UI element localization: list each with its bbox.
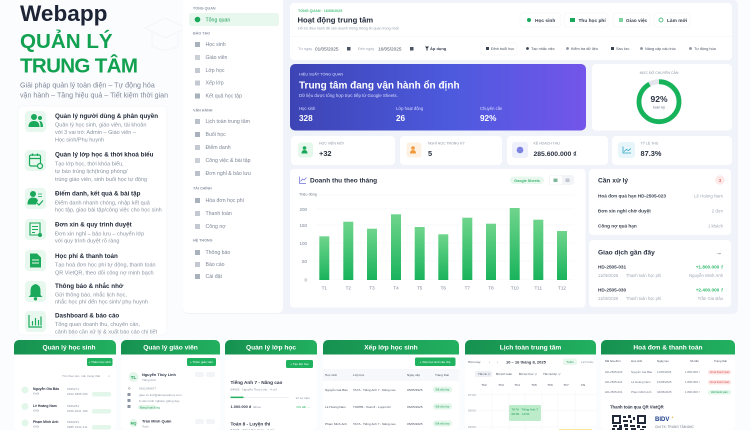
- menu group: tài chính: Công nợ: [206, 224, 226, 230]
- menu group: đào tạo: Kết quả học tập: [206, 94, 242, 100]
- card: quản lý lớp học: [225, 340, 317, 430]
- stat: học sinh: Học sinh: [299, 106, 316, 111]
- KPI: tỷ lệ thu: [612, 136, 732, 165]
- card: lịch toàn trung tâm: 09:00: [468, 425, 476, 429]
- menu group: hệ thống: HỆ THỐNG: [193, 238, 213, 242]
- card: xếp lớp học sinh: 05/05/2025: [407, 422, 423, 426]
- quick action buttons: Làm mới: [667, 18, 687, 24]
- card: quản lý lớp học: Quản lý lớp học: [246, 344, 296, 352]
- menu group: vận hành: VẬN HÀNH: [193, 107, 213, 112]
- x axis labels: T5: [417, 285, 423, 290]
- card: hoá đơn & thanh toán: ✦: [671, 416, 675, 420]
- card: lịch toàn trung tâm: Lịch toàn trung tâm: [500, 344, 561, 352]
- feature: lớp học: Quản lý lớp học & thời khoá biểu: [55, 152, 154, 158]
- card: quản lý giáo viên: Toán: [142, 424, 149, 428]
- feature: người dùng: với 3 vai trò: Admin – Giáo viên –: [55, 130, 137, 136]
- feature: điểm danh: Điểm danh nhanh chóng, nhập kết quả: [55, 199, 151, 206]
- card: quản lý giáo viên: Đang hoạt động: [140, 405, 160, 409]
- stat: học sinh: [299, 106, 316, 123]
- active menu item: [189, 13, 279, 26]
- panel: attendance ring: toàn kỳ: [653, 106, 665, 110]
- x axis labels: T1: [322, 285, 327, 290]
- feature: học phí: QR VietQR, theo dõi công nợ minh bạch: [55, 270, 154, 276]
- stat: chuyên cần: Chuyên cần: [480, 106, 503, 111]
- menu group: vận hành: Buổi học: [206, 131, 226, 138]
- KPI: học viên mới: [291, 136, 395, 165]
- quick action buttons: Học sinh: [535, 18, 555, 24]
- feature: thông báo: Thông báo & nhắc nhở: [55, 283, 124, 290]
- panel: page header: Hoạt động trung tâm: [298, 16, 373, 24]
- bars: [319, 208, 567, 280]
- title: Quản lý trung tâm: [20, 29, 138, 78]
- y axis labels: 200: [299, 207, 307, 212]
- card: lịch toàn trung tâm: 07:00: [468, 393, 476, 397]
- card: xếp lớp học sinh: TO8HB - Toán 8 - Luyện thi: [353, 405, 391, 409]
- panel: hero performance summary: HIỆU SUẤT TỔNG QUAN: [299, 71, 343, 76]
- card: lịch toàn trung tâm: 08:00: [468, 408, 476, 412]
- feature: học phí: [25, 250, 156, 276]
- y axis labels: 50: [302, 259, 307, 264]
- menu group: hệ thống: Cài đặt: [206, 274, 222, 280]
- feature: người dùng: Quản lý người dùng & phân quyền: [55, 113, 158, 120]
- card: hoá đơn & thanh toán: Phạm Minh Anh: [631, 390, 652, 394]
- menu group: vận hành: Điểm danh: [206, 144, 231, 151]
- panel: cần xử lý: Đơn xin nghỉ chờ duyệt: [598, 209, 651, 214]
- panel: page header: Hỗ trợ điều hành để vận doanh thông thông tin quan trọng nhất: [298, 25, 399, 30]
- panel: giao dịch gần đây: Giao dịch gần đây: [598, 248, 655, 256]
- card: quản lý học sinh: 0985 1642 311: [67, 425, 88, 429]
- feature: người dùng: [25, 111, 158, 144]
- card: xếp lớp học sinh: Lê Hoàng Nam: [325, 405, 346, 409]
- y axis label: Triệu đồng: [299, 192, 317, 196]
- card: xếp lớp học sinh: Xếp lớp học sinh: [364, 344, 418, 352]
- card: quản lý lớp học: 1.000.000 đ: [230, 404, 252, 409]
- date filter: Áp dụng: [430, 46, 447, 51]
- toolbar actions: Đỉnh buổi học: [491, 47, 514, 51]
- feature: học phí: Học phí & thanh toán: [55, 253, 118, 260]
- feature: học phí: Tạo hoá đơn học phí tự động, thanh toán: [55, 263, 156, 269]
- subtitle: Giải pháp quản lý toàn diện – Tự động hóa: [20, 82, 155, 90]
- toolbar actions: Tạo nhắc việc: [531, 46, 555, 51]
- feature: đơn xin: Đơn xin & quy trình duyệt: [55, 222, 132, 228]
- panel: giao dịch gần đây: Thanh toán học phí: [626, 296, 662, 301]
- card: quản lý lớp học: + Tạo lớp học: [290, 362, 309, 366]
- card: lịch toàn trung tâm: Th2: [481, 383, 487, 387]
- panel: attendance ring: MỨC ĐỘ CHUYÊN CẦN: [640, 70, 679, 75]
- card: quản lý học sinh: Phạm Minh Anh: [33, 420, 58, 424]
- feature: điểm danh: [25, 188, 162, 214]
- x axis labels: T10: [511, 285, 519, 290]
- card: quản lý học sinh: Khối: [33, 424, 40, 428]
- x axis labels: T3: [369, 285, 375, 290]
- card: xếp lớp học sinh: Đã xếp lớp: [436, 405, 450, 409]
- title: Webapp: Webapp: [20, 1, 107, 26]
- y axis labels: [299, 207, 307, 282]
- menu group: vận hành: Đơn nghỉ & bảo lưu: [206, 170, 251, 177]
- stat: chuyên cần: 92%: [480, 114, 497, 123]
- y axis labels: 100: [299, 241, 307, 246]
- toolbar actions: Kiểm tra dữ liệu: [571, 47, 598, 51]
- menu group: đào tạo: ĐÀO TẠO: [193, 30, 210, 36]
- card: xếp lớp học sinh: 05/05/2025: [407, 388, 423, 392]
- card: hoá đơn & thanh toán: Trạng thái: [714, 359, 727, 363]
- card: quản lý học sinh: Khối: [33, 392, 40, 396]
- card: hoá đơn & thanh toán: 1.800.000 ₫: [685, 390, 701, 394]
- card: quản lý lớp học: B4905 · Nguyễn Thùy Linh · 4 chỉ: [230, 386, 277, 392]
- card: xếp lớp học sinh: Trạng thái: [435, 373, 449, 377]
- card: hoá đơn & thanh toán: Mã hóa đơn: [605, 359, 621, 363]
- x axis labels: T6: [441, 285, 446, 290]
- menu group: đào tạo: Giáo viên: [206, 55, 228, 61]
- card: hoá đơn & thanh toán: Hoá đơn & thanh toán: [633, 344, 703, 352]
- card: quản lý lớp học: Tiếng Anh 7 - Nâng cao: [230, 379, 282, 385]
- card: lịch toàn trung tâm: TA7A · Tiếng Anh 7: [512, 408, 538, 412]
- card: xếp lớp học sinh: Học sinh: [325, 373, 337, 377]
- toolbar actions: Nâng cấp cấu trúc: [645, 47, 676, 51]
- card: lịch toàn trung tâm: Th7: [563, 383, 569, 387]
- panel: cần xử lý: Công nợ quá hạn: [598, 224, 637, 229]
- KPI: kế hoạch thu: [507, 136, 608, 165]
- card: lịch toàn trung tâm: Tuần: [567, 360, 574, 364]
- card: lịch toàn trung tâm: Bộ lọc học ∨: [519, 372, 537, 376]
- x axis labels: T4: [393, 285, 399, 290]
- feature: đơn xin: Đơn xin nghỉ – bảo lưu – chuyển lớp: [55, 230, 144, 237]
- x axis labels: T8: [488, 285, 494, 290]
- active menu item: Tổng quan: [206, 16, 230, 23]
- KPI: học viên mới: HỌC VIÊN MỚI: [319, 140, 344, 146]
- card: xếp lớp học sinh: Đã xếp lớp: [436, 422, 450, 426]
- date filter: Từ ngày: [298, 47, 312, 51]
- card: hoá đơn & thanh toán: Lê Hoàng Nam: [631, 380, 651, 384]
- card: quản lý học sinh: 0936291: [67, 420, 79, 424]
- card: quản lý học sinh: 0936271: [67, 387, 79, 391]
- card: quản lý học sinh: 0918 2041 186: [67, 409, 88, 413]
- date filter: [298, 46, 447, 51]
- panel: giao dịch gần đây: [589, 240, 731, 307]
- card: quản lý giáo viên: Quản lý giáo viên: [143, 344, 198, 352]
- card: hoá đơn & thanh toán: 04/05/2025: [657, 390, 672, 394]
- card: hoá đơn & thanh toán: Ngày tạo: [657, 359, 669, 363]
- feature: dashboard: Tổng quan doanh thu, chuyên cần,: [55, 321, 140, 328]
- panel: giao dịch gần đây: HD-2505-031: [598, 265, 627, 270]
- menu group: tài chính: TÀI CHÍNH: [193, 185, 212, 190]
- feature: thông báo: Gửi thông báo, nhắc lịch học,: [55, 291, 127, 298]
- card: quản lý lớp học: Chi tiết →: [296, 405, 310, 409]
- menu group: vận hành: Lịch toàn trung tâm: [206, 119, 250, 125]
- menu group: hệ thống: Thông báo: [206, 250, 230, 256]
- card: lịch toàn trung tâm: [465, 340, 596, 430]
- date filter: 16/05/2025: [378, 46, 402, 51]
- feature: lớp học: trùng giáo viên, sinh buổi học tự động: [55, 176, 147, 183]
- panel: revenue bar chart: [290, 169, 586, 308]
- panel: giao dịch gần đây: 11/05/2025: [598, 273, 619, 278]
- card: lịch toàn trung tâm: Th3: [498, 383, 504, 387]
- card: hoá đơn & thanh toán: HD-2505-023: [605, 370, 623, 374]
- stat: lớp hoạt động: Lớp hoạt động: [396, 106, 424, 111]
- card: lịch toàn trung tâm: Bộ lịch toàn: [496, 372, 512, 376]
- feature: đơn xin: [25, 219, 144, 245]
- menu group: đào tạo: Lớp học: [206, 68, 225, 74]
- card: quản lý học sinh: Quản lý học sinh: [42, 344, 96, 352]
- toolbar actions: [481, 43, 717, 55]
- card: quản lý học sinh: Tìm theo tên, mã, trạng thái: [62, 374, 100, 378]
- menu group: đào tạo: [193, 30, 242, 100]
- feature: điểm danh: Điểm danh, kết quả & bài tập: [55, 190, 141, 198]
- card: hoá đơn & thanh toán: Chủ TK: TRUNG TÂM ANC: [655, 425, 694, 429]
- card: quản lý giáo viên: [121, 340, 220, 430]
- card: lịch toàn trung tâm: 08:00 · 14:01: [512, 412, 530, 416]
- icon: chart line: [300, 176, 306, 184]
- stat: lớp hoạt động: [396, 106, 424, 123]
- card: hoá đơn & thanh toán: Chưa thanh toán: [710, 380, 730, 384]
- icon: graduation cap watermark: [145, 18, 186, 50]
- feature: dashboard: [25, 311, 158, 335]
- x axis labels: [322, 285, 566, 290]
- card: quản lý giáo viên: 0912345677: [139, 386, 156, 390]
- card: quản lý giáo viên: ✆: [128, 386, 131, 390]
- x axis labels: T11: [535, 285, 543, 290]
- card: lịch toàn trung tâm: 10 – 16 tháng 8, 2025: [506, 359, 547, 364]
- panel: hero performance summary: Trung tâm đang vận hành ổn định: [299, 80, 460, 92]
- quick action buttons: Giao việc: [626, 18, 648, 24]
- panel: giao dịch gần đây: →: [716, 250, 722, 256]
- card: quản lý học sinh: + Thêm học sinh: [89, 360, 111, 364]
- KPI: nghỉ học trong kỳ: [400, 136, 502, 165]
- KPI: tỷ lệ thu: TỶ LỆ THU: [640, 140, 659, 146]
- card: xếp lớp học sinh: Phạm Minh Anh: [325, 422, 347, 426]
- panel: cần xử lý: 2 đơn: [712, 209, 724, 214]
- feature: đơn xin: với quy trình duyệt rõ ràng: [55, 239, 119, 245]
- panel: cần xử lý: Cần xử lý: [598, 176, 628, 184]
- stat: chuyên cần: [480, 106, 503, 123]
- feature: lớp học: [25, 150, 154, 183]
- card: xếp lớp học sinh: [323, 340, 459, 430]
- stat: học sinh: 328: [299, 114, 313, 123]
- card: quản lý giáo viên: TL: [131, 375, 136, 380]
- card: lịch toàn trung tâm: ›: [497, 360, 498, 364]
- card: quản lý giáo viên: Nguyễn Thùy Linh: [142, 372, 177, 377]
- feature: lớp học: tự báo trùng lịch(trùng phòng/: [55, 169, 128, 175]
- panel: giao dịch gần đây: Trần Gia Bảo: [698, 296, 724, 301]
- card: xếp lớp học sinh: TA7A - Tiếng Anh 7 - Nâng cao: [353, 388, 396, 392]
- date filter: Đến ngày: [358, 47, 374, 51]
- x axis labels: T12: [558, 285, 566, 290]
- card: quản lý học sinh: Lê Hoàng Nam: [33, 404, 57, 408]
- card: quản lý giáo viên: Trần Minh Quân: [142, 418, 172, 424]
- panel: page header: TỔNG QUAN · 16/05/2025: [298, 8, 342, 13]
- KPI: nghỉ học trong kỳ: NGHỈ HỌC TRONG KỲ: [428, 140, 465, 146]
- subtitle: vận hành – Tăng hiệu quả – Tiết kiệm thời gian: [20, 90, 168, 100]
- card: xếp lớp học sinh: Ngày xếp: [407, 373, 420, 377]
- menu group: hệ thống: [193, 238, 230, 280]
- menu group: tài chính: Thanh toán: [206, 211, 232, 217]
- panel: cần xử lý: [589, 169, 731, 235]
- card: quản lý học sinh: ⌕: [108, 374, 110, 378]
- card: quản lý học sinh: Khối: [33, 408, 40, 412]
- card: xếp lớp học sinh: Lớp học: [353, 373, 365, 377]
- stat: lớp hoạt động: 26: [396, 114, 406, 123]
- menu group: tài chính: [193, 185, 245, 230]
- card: hoá đơn & thanh toán: 10/05/2025: [657, 380, 672, 384]
- panel: giao dịch gần đây: Nguyễn Minh Anh: [689, 273, 724, 278]
- card: quản lý giáo viên: 6 năm kinh nghiệm giảng dạy: [139, 399, 180, 403]
- card: lịch toàn trung tâm: Tất cả lớp ∨: [543, 372, 561, 376]
- panel: sidebar: [183, 0, 283, 313]
- card: xếp lớp học sinh: Đã xếp lớp: [436, 388, 450, 392]
- feature: thông báo: nhắc học phí đến học sinh/ phụ huynh: [55, 299, 148, 306]
- card: hoá đơn & thanh toán: HD-2505-024: [605, 380, 623, 384]
- card: hoá đơn & thanh toán: Số tiền: [690, 359, 699, 363]
- card: quản lý lớp học: /khóa: [253, 405, 261, 409]
- menu group: vận hành: [193, 107, 251, 177]
- card: quản lý lớp học: Toán 8 - Luyện thi: [230, 422, 270, 426]
- card: lịch toàn trung tâm: Th4: [514, 383, 520, 387]
- panel: cần xử lý: Hoá đơn quá hạn HD-2505-023: [598, 194, 666, 199]
- gridlines: [316, 195, 574, 280]
- KPI: học viên mới: +32: [319, 149, 332, 158]
- card: quản lý học sinh: 0912 8355 200: [67, 392, 88, 396]
- card: hoá đơn & thanh toán: Nguyễn Gia Bảo: [631, 369, 653, 374]
- KPI: kế hoạch thu: 285.600.000 ₫: [534, 151, 577, 158]
- panel: cần xử lý: 3: [719, 178, 722, 184]
- card: hoá đơn & thanh toán: [601, 340, 735, 430]
- x axis labels: T7: [465, 285, 470, 290]
- feature: lớp học: Tạo lớp học, thời khóa biểu,: [55, 160, 124, 167]
- card: lịch toàn trung tâm: CN: [581, 383, 585, 387]
- card: xếp lớp học sinh: TA7A - Tiếng Anh 7 - Nâng cao: [353, 422, 396, 426]
- card: quản lý giáo viên: MQ: [131, 422, 137, 426]
- quick action buttons: [520, 13, 690, 27]
- panel: attendance ring: [592, 64, 732, 130]
- menu group: hệ thống: Báo cáo: [206, 262, 225, 268]
- x axis labels: T2: [346, 285, 351, 290]
- y axis labels: 150: [299, 223, 307, 228]
- menu group: đào tạo: Xếp lớp: [206, 80, 224, 86]
- feature: người dùng: Quản lý học sinh, giáo viên, tài khoản: [55, 122, 146, 128]
- feature: thông báo: [25, 281, 148, 306]
- KPI: nghỉ học trong kỳ: 5: [428, 149, 432, 158]
- feature: điểm danh: học tập, giao bài tập/công việc cho học sinh: [55, 208, 162, 214]
- card: quản lý lớp học: 12 sự kiện: [296, 396, 310, 400]
- card: xếp lớp học sinh: 05/05/2025: [407, 405, 423, 409]
- card: quản lý giáo viên: Tiếng Anh: [142, 378, 156, 382]
- panel: page header: [290, 3, 732, 60]
- badge: Google Sheets: [510, 176, 544, 184]
- panel: hero performance summary: [290, 64, 586, 130]
- subtitle: [20, 82, 168, 100]
- panel: feature list: [18, 106, 167, 335]
- panel: cần xử lý: Lê Hoàng Nam: [694, 194, 723, 199]
- panel: hero performance summary: Dữ liệu được tổng hợp trực tiếp từ Google Sheets.: [299, 93, 398, 98]
- panel: giao dịch gần đây: HD-2505-030: [598, 288, 627, 293]
- card: hoá đơn & thanh toán: HD-2505-031: [605, 390, 623, 394]
- card: hoá đơn & thanh toán: Đã thanh toán: [711, 390, 728, 394]
- card: hoá đơn & thanh toán: 11/05/2025: [657, 370, 672, 374]
- panel: giao dịch gần đây: Thanh toán học phí: [626, 273, 662, 278]
- panel: main app background: [183, 0, 738, 314]
- date filter: 01/05/2025: [315, 46, 339, 51]
- title: Quản lý trung tâm: QUẢN LÝ: [20, 29, 113, 53]
- panel: giao dịch gần đây: 11/05/2025: [598, 296, 619, 301]
- card: lịch toàn trung tâm: Lịch biểu: [581, 360, 594, 364]
- menu group: tài chính: Hóa đơn học phí: [206, 198, 245, 204]
- panel: attendance ring: 92%: [650, 94, 668, 104]
- left hero column: [20, 1, 186, 100]
- card: xếp lớp học sinh: + Xếp học sinh vào lớp: [420, 360, 451, 364]
- card: hoá đơn & thanh toán: 1.800.000 ₫: [685, 370, 701, 374]
- card: hoá đơn & thanh toán: BIDV: [655, 417, 669, 423]
- y axis labels: 0: [304, 277, 307, 282]
- card: lịch toàn trung tâm: Hôm nay: [468, 360, 481, 364]
- badge: Google Sheets: Google Sheets: [514, 179, 540, 183]
- feature: người dùng: Học sinh/Phụ huynh: [55, 138, 104, 144]
- KPI: kế hoạch thu: KẾ HOẠCH THU: [534, 140, 560, 146]
- card: quản lý giáo viên: + Thêm giáo viên: [190, 360, 213, 364]
- card: lịch toàn trung tâm: Th6: [547, 383, 553, 387]
- panel: cần xử lý: 1 khách: [708, 224, 724, 229]
- card: quản lý học sinh: 0936281: [67, 404, 79, 408]
- card: quản lý học sinh: Nguyễn Gia Bảo: [33, 387, 59, 391]
- toolbar actions: Tự động hóa: [694, 47, 717, 51]
- KPI: tỷ lệ thu: 87.3%: [640, 149, 662, 158]
- toolbar actions: Sao lưu: [616, 47, 629, 51]
- panel: giao dịch gần đây: +2.400.000 ₫: [696, 288, 724, 293]
- panel: sidebar: TỔNG QUAN: [193, 5, 216, 10]
- quick action buttons: Thu học phí: [578, 18, 606, 24]
- feature: dashboard: cảnh báo cần xử lý & xuất báo cáo chi tiết: [55, 328, 158, 335]
- card: hoá đơn & thanh toán: Học sinh: [631, 359, 643, 363]
- card: lịch toàn trung tâm: Tất cả ∨: [478, 372, 491, 376]
- title: Quản lý trung tâm: TRUNG TÂM: [20, 54, 138, 78]
- card: lịch toàn trung tâm: ‹: [489, 360, 490, 364]
- feature: dashboard: Dashboard & báo cáo: [55, 313, 119, 320]
- chart type toggle: [549, 175, 574, 185]
- chart title: Doanh thu theo tháng: [310, 178, 377, 184]
- menu group: vận hành: Công việc & bài tập: [206, 158, 251, 164]
- card: hoá đơn & thanh toán: Thanh toán qua QR VietQR: [610, 404, 664, 410]
- card: lịch toàn trung tâm: Th5: [531, 383, 537, 387]
- QR code: [612, 415, 646, 430]
- card: hoá đơn & thanh toán: Chưa thanh toán: [710, 370, 730, 374]
- card: xếp lớp học sinh: Nguyễn Gia Bảo: [325, 387, 348, 392]
- panel: giao dịch gần đây: +1.800.000 ₫: [696, 265, 724, 270]
- menu group: đào tạo: Học sinh: [206, 42, 226, 48]
- card: quản lý giáo viên: giao.vn.linh@abcacademy.com: [139, 393, 182, 397]
- card: quản lý học sinh: [14, 340, 116, 430]
- card: hoá đơn & thanh toán: 1.800.000 ₫: [685, 380, 701, 384]
